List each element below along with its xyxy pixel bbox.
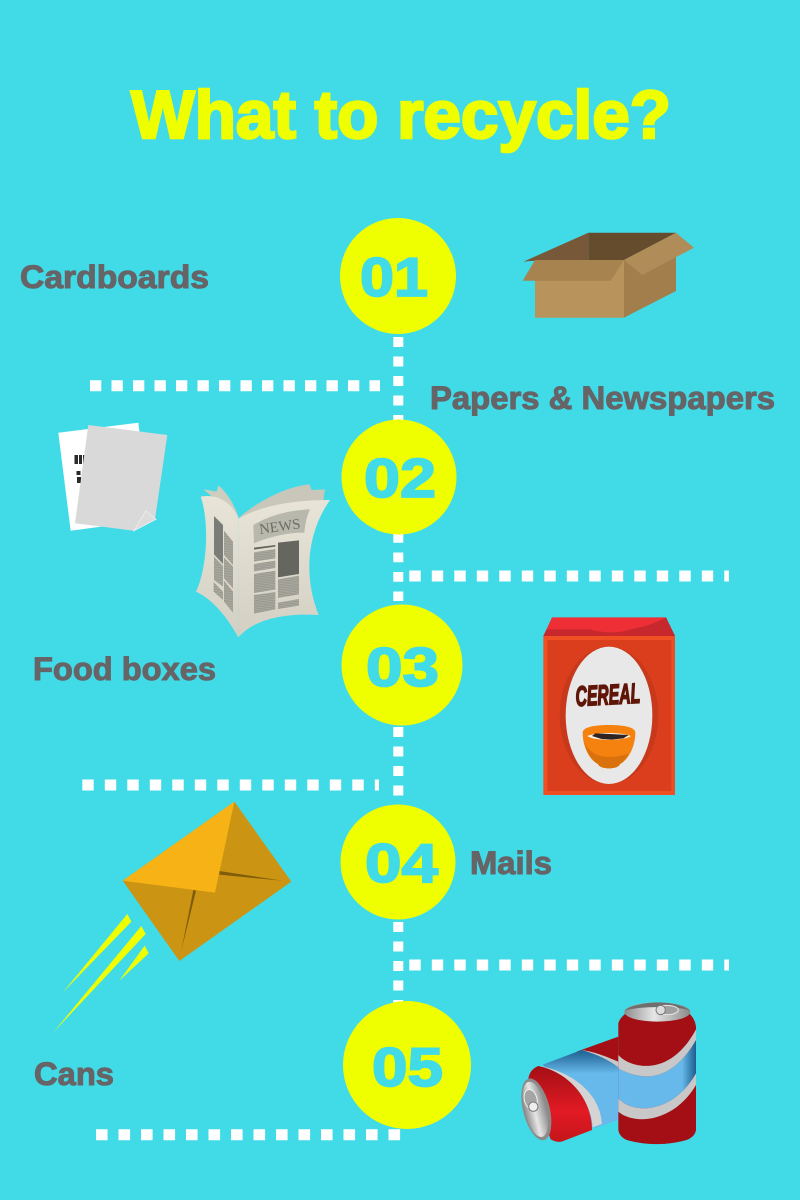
icon: cereal box: CEREAL	[575, 678, 641, 712]
step 04: number circle	[340, 804, 456, 920]
icon: cereal box	[543, 617, 675, 795]
step 02: number circle: 02	[364, 447, 436, 509]
icon: cardboard box	[523, 233, 694, 318]
label: Cans: Cans	[34, 1056, 114, 1092]
step 02: number circle	[342, 420, 456, 534]
label: Cardboards: Cardboards	[20, 259, 209, 295]
step 05: number circle: 05	[372, 1036, 443, 1098]
icon: paper sheets	[58, 423, 167, 531]
step 04: number circle: 04	[365, 832, 438, 894]
step 01: number circle	[340, 218, 456, 334]
step 01: number circle: 01	[360, 246, 428, 308]
icon: flying envelope	[53, 802, 291, 1032]
icon: newspaper	[196, 484, 330, 637]
icon: newspaper: NEWS	[258, 516, 301, 538]
label: Food boxes: Food boxes	[33, 651, 216, 687]
dotted connector lines	[82, 337, 729, 1135]
label: Papers & Newspapers: Papers & Newspapers	[430, 380, 775, 416]
step 05: number circle	[343, 1001, 471, 1129]
step 03: number circle: 03	[366, 636, 439, 698]
step 03: number circle	[342, 604, 462, 726]
label: Mails: Mails	[470, 845, 552, 881]
icon: soda cans	[516, 1002, 696, 1144]
title: What to recycle?	[131, 77, 671, 153]
